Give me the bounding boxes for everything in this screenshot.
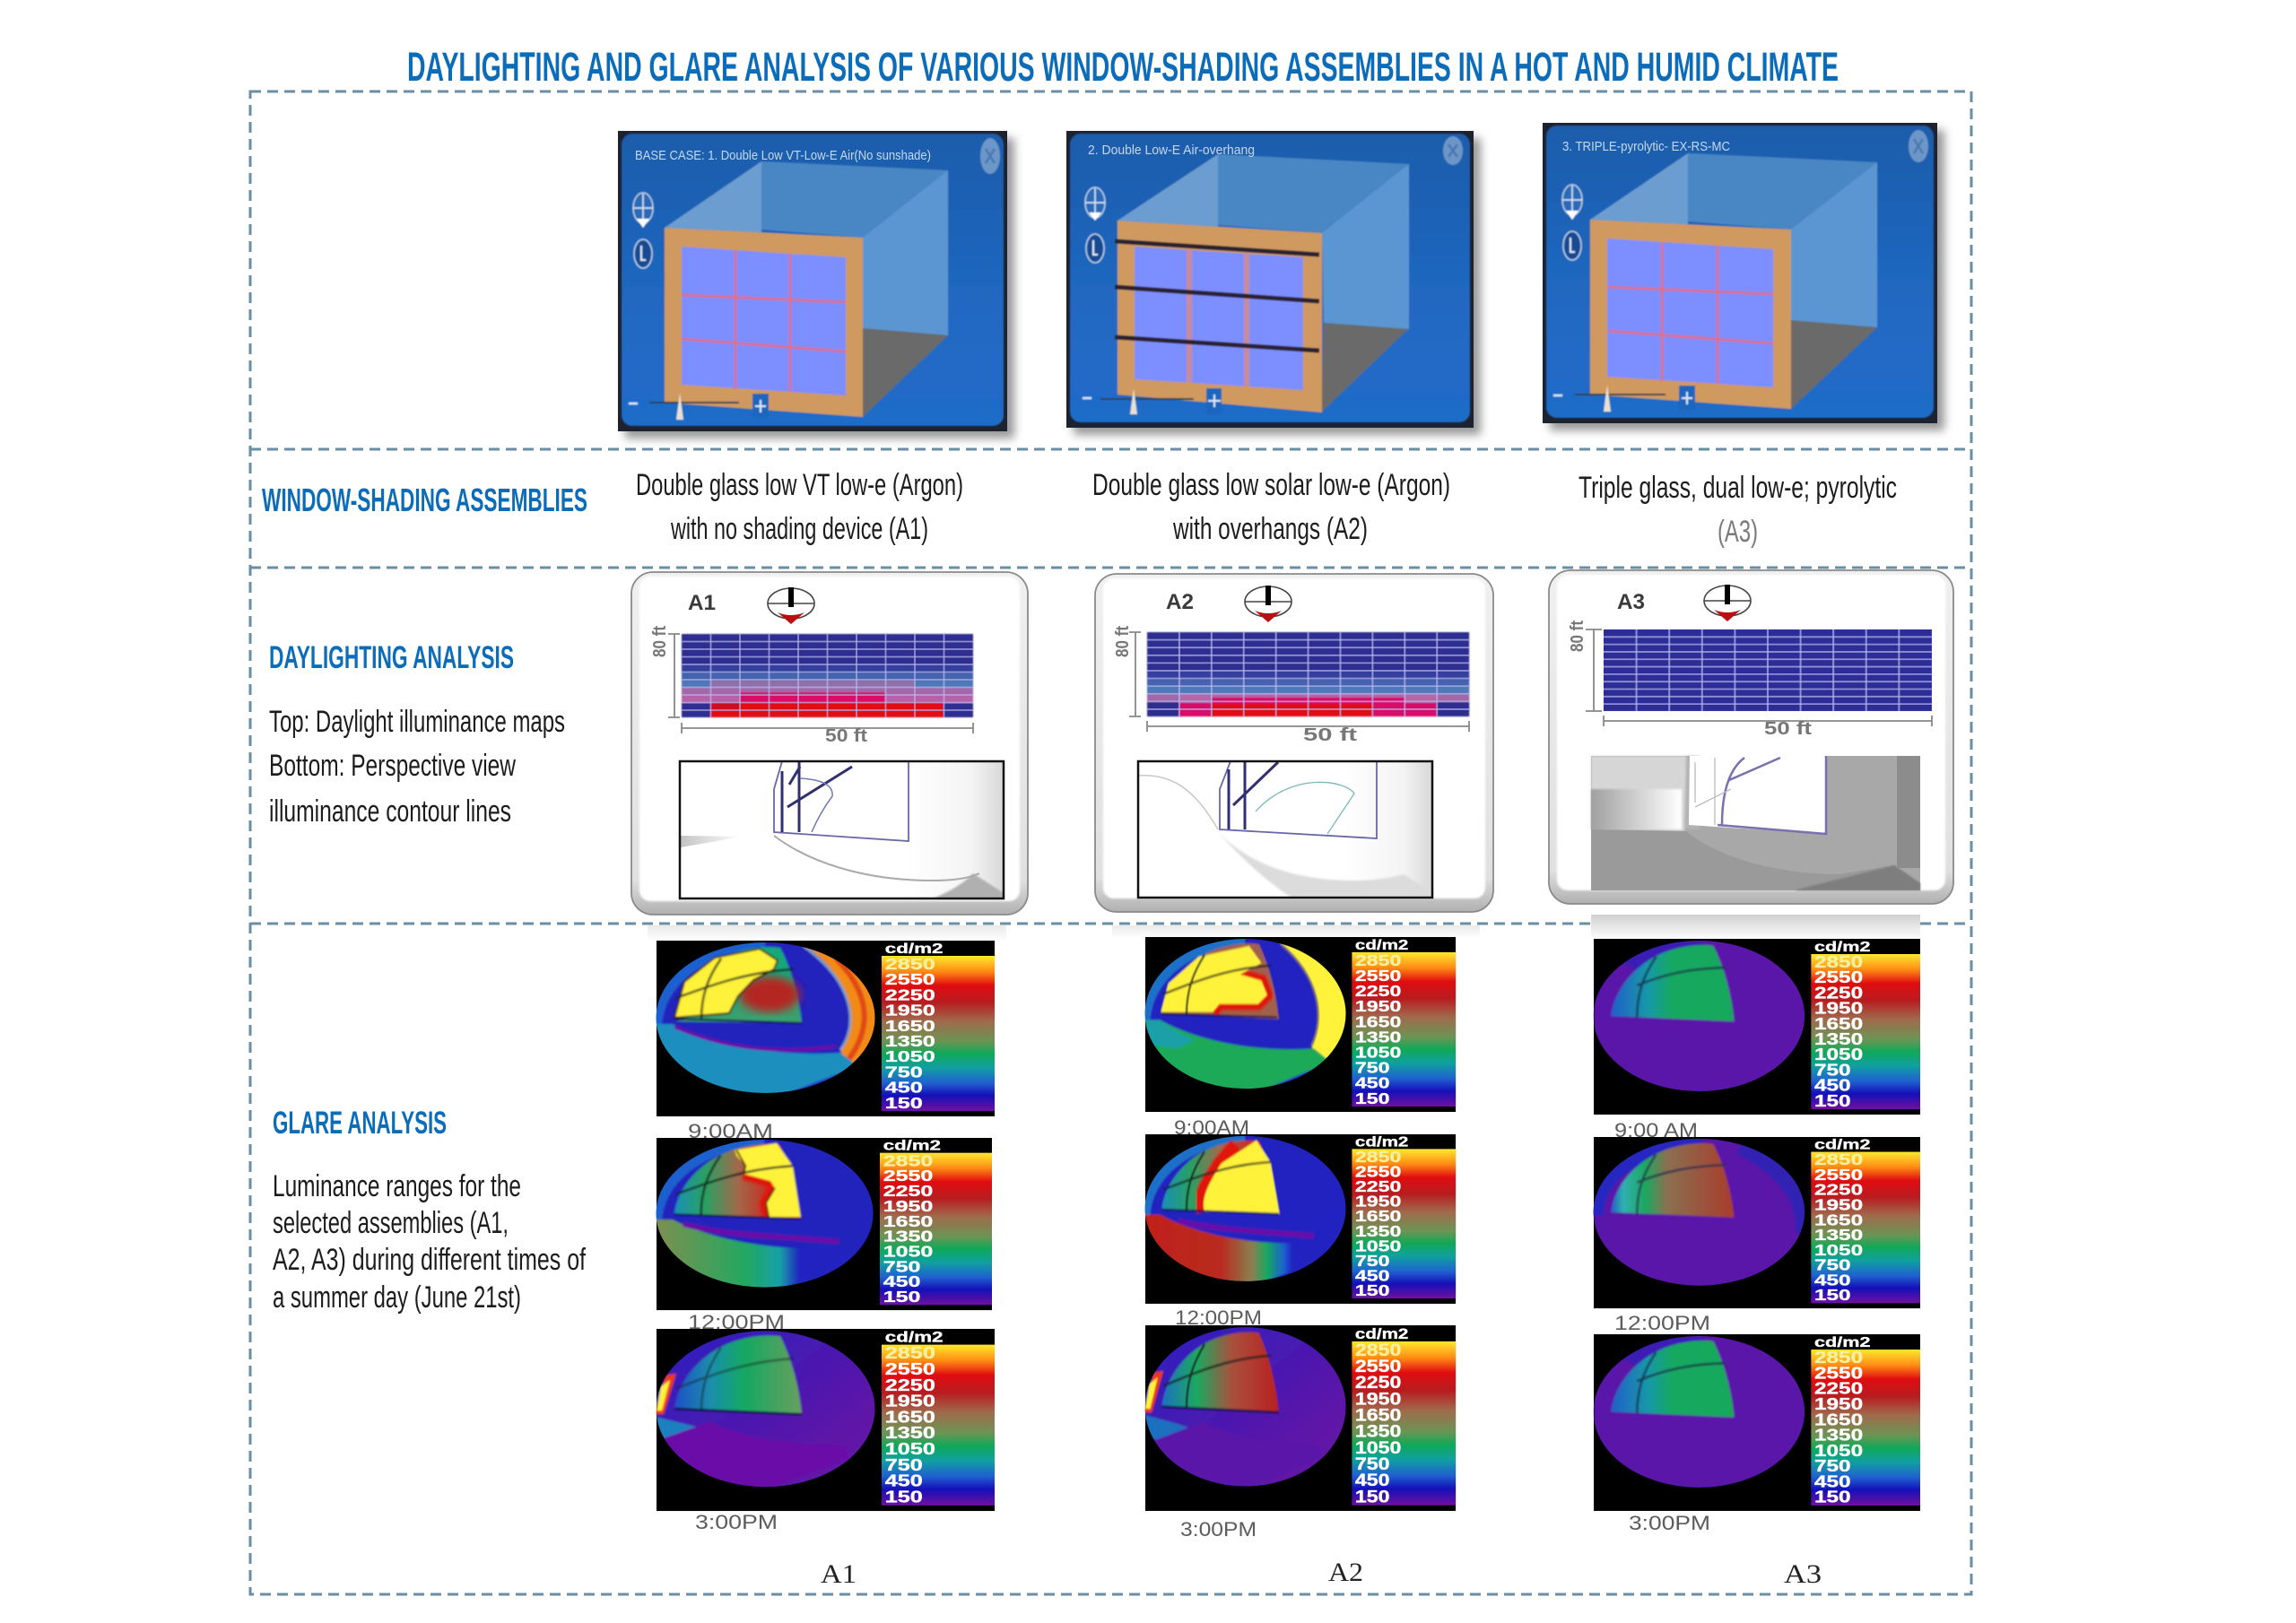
panel: window model A3: 3. TRIPLE-pyrolytic- EX-RS-MC xyxy=(1562,139,1730,154)
glare map A2 12:00PM: 1050 xyxy=(1355,1237,1401,1255)
time label A2 12PM: 12:00PM xyxy=(1175,1306,1262,1329)
icon: compass xyxy=(1704,585,1751,621)
glare map A3 3:00PM: 1050 xyxy=(1814,1442,1863,1460)
panel: daylighting card A3 xyxy=(1549,570,1953,904)
glare map A3 12:00PM: 1950 xyxy=(1814,1197,1863,1214)
glare map A1 9:00AM xyxy=(655,941,995,1116)
glare map A3 12:00PM: 1350 xyxy=(1814,1227,1863,1244)
glare map A2 3:00PM: 1950 xyxy=(1355,1390,1401,1409)
glare map A3 12:00PM: 2850 xyxy=(1814,1151,1863,1168)
text: glare description: a summer day (June 21st) xyxy=(273,1280,521,1315)
glare map A2 3:00PM: 2850 xyxy=(1355,1341,1401,1359)
glare map A2 9:00AM: 2550 xyxy=(1355,967,1401,985)
glare map A1 9:00AM: cd/m2 xyxy=(885,941,944,957)
column label A1: A1 xyxy=(821,1559,857,1589)
time label A1 9AM: 9:00AM xyxy=(688,1120,773,1142)
glare map A1 9:00AM: 2550 xyxy=(885,970,935,988)
label: A2: A2 xyxy=(1166,590,1194,614)
glare map A1 3:00PM: 2250 xyxy=(885,1376,935,1394)
text: glare description: selected assemblies (A1, xyxy=(273,1206,509,1240)
dimension 80 ft: 80 ft xyxy=(1113,626,1133,657)
glare map A1 9:00AM: 2250 xyxy=(885,985,935,1004)
dimension 50 ft: 50 ft xyxy=(1764,719,1812,739)
glare map A3 3:00PM: 150 xyxy=(1814,1488,1851,1506)
glare map A1 3:00PM xyxy=(655,1329,995,1511)
text: assembly A3 description: (A3) xyxy=(1718,515,1758,549)
glare map A1 3:00PM: 1650 xyxy=(885,1408,935,1427)
perspective contour view A3 xyxy=(1591,756,1920,890)
glare map A2 3:00PM: 1050 xyxy=(1355,1439,1401,1457)
glare map A1 3:00PM: cd/m2 xyxy=(885,1329,944,1346)
text: assembly A1 description: with no shading device (A1) xyxy=(670,512,928,546)
glare map A3 9:00AM: 2550 xyxy=(1814,968,1863,986)
time label A2 9AM: 9:00AM xyxy=(1174,1116,1249,1139)
panel: window model A2 xyxy=(1066,131,1481,435)
perspective contour view A1 xyxy=(680,761,1004,898)
glare map A3 9:00AM: 150 xyxy=(1814,1092,1851,1110)
time label A3 12PM: 12:00PM xyxy=(1614,1312,1710,1334)
icon: compass xyxy=(768,587,814,624)
glare map A3 12:00PM: 750 xyxy=(1814,1257,1851,1274)
glare map A3 12:00PM: 1050 xyxy=(1814,1242,1863,1259)
time label A1 12PM: 12:00PM xyxy=(688,1311,785,1333)
glare map A2 9:00AM: 1050 xyxy=(1355,1044,1401,1062)
glare map A3 9:00AM: 1650 xyxy=(1814,1015,1863,1033)
glare map A2 12:00PM: 2550 xyxy=(1355,1163,1401,1181)
glare map A2 3:00PM: 1650 xyxy=(1355,1406,1401,1425)
text: daylighting description: Bottom: Perspective view xyxy=(269,749,516,783)
text: assembly A1 description: Double glass low VT low-e (Argon) xyxy=(636,468,963,502)
heading: daylighting analysis: DAYLIGHTING ANALYSIS xyxy=(269,640,514,675)
glare map A2 3:00PM xyxy=(1144,1325,1456,1511)
glare map A2 3:00PM: 450 xyxy=(1355,1471,1389,1490)
text: daylighting description xyxy=(269,705,565,829)
glare map A2 9:00AM: cd/m2 xyxy=(1355,936,1408,952)
glare map A3 9:00AM: 750 xyxy=(1814,1061,1851,1080)
dimension 50 ft: 50 ft xyxy=(825,726,867,746)
glare map A3 12:00PM: 2250 xyxy=(1814,1182,1863,1199)
dimension 50 ft: 50 ft xyxy=(1303,725,1357,745)
label: A1: A1 xyxy=(688,591,716,615)
glare map A3 3:00PM xyxy=(1594,1334,1920,1511)
glare map A2 9:00AM: 1950 xyxy=(1355,998,1401,1016)
glare map A1 12:00PM: 150 xyxy=(883,1288,920,1306)
glare map A2 9:00AM: 750 xyxy=(1355,1059,1389,1077)
glare map A2 12:00PM: 450 xyxy=(1355,1267,1389,1285)
glare map A3 12:00PM: cd/m2 xyxy=(1814,1137,1870,1152)
heading: glare analysis: GLARE ANALYSIS xyxy=(273,1106,447,1141)
text: assembly A1 description xyxy=(636,468,963,546)
glare map A1 3:00PM: 1350 xyxy=(885,1423,935,1442)
text: daylighting description: illuminance contour lines xyxy=(269,794,511,829)
glare map A1 12:00PM: 450 xyxy=(883,1272,920,1290)
glare map A3 3:00PM: 750 xyxy=(1814,1457,1851,1475)
glare map A2 12:00PM: 1650 xyxy=(1355,1208,1401,1225)
glare map A3 3:00PM: 1650 xyxy=(1814,1410,1863,1429)
glare map A3 12:00PM: 450 xyxy=(1814,1271,1851,1289)
panel: window model A2: 2. Double Low-E Air-overhang xyxy=(1088,143,1255,158)
glare map A2 9:00AM xyxy=(1144,936,1456,1112)
glare map A1 12:00PM: 1350 xyxy=(883,1227,933,1245)
glare map A2 12:00PM: 2250 xyxy=(1355,1178,1401,1195)
illuminance map A2 xyxy=(1147,632,1469,716)
glare map A1 9:00AM: 1950 xyxy=(885,1001,935,1020)
glare map A2 3:00PM: cd/m2 xyxy=(1355,1325,1408,1341)
panel: window model A1: BASE CASE: 1. Double Low VT-Low-E Air(No sunshade) xyxy=(635,148,931,163)
glare map A2 12:00PM xyxy=(1144,1134,1456,1304)
glare map A1 12:00PM xyxy=(655,1138,992,1310)
glare map A1 12:00PM: 2250 xyxy=(883,1182,933,1200)
glare map A2 12:00PM: 1350 xyxy=(1355,1222,1401,1240)
glare map A1 9:00AM: 2850 xyxy=(885,955,935,973)
glare map A3 9:00AM: 1950 xyxy=(1814,1000,1863,1018)
glare map A3 12:00PM: 2550 xyxy=(1814,1167,1863,1184)
text: glare description xyxy=(273,1169,586,1315)
illuminance map A1 xyxy=(682,634,973,717)
glare map A1 3:00PM: 750 xyxy=(885,1455,923,1474)
faint card reflections xyxy=(648,915,1920,942)
time label A3 3PM: 3:00PM xyxy=(1629,1512,1710,1534)
glare map A1 12:00PM: 750 xyxy=(883,1257,920,1275)
glare map A1 3:00PM: 2550 xyxy=(885,1359,935,1378)
glare map A2 12:00PM: 150 xyxy=(1355,1282,1389,1299)
text: assembly A2 description xyxy=(1092,468,1450,546)
glare map A1 12:00PM: 1050 xyxy=(883,1242,933,1261)
glare map A2 9:00AM: 1650 xyxy=(1355,1013,1401,1031)
glare map A3 3:00PM: 2850 xyxy=(1814,1349,1863,1367)
panel: daylighting card A2 xyxy=(1095,574,1493,912)
glare map A2 3:00PM: 2250 xyxy=(1355,1374,1401,1393)
time label A3 9AM: 9:00 AM xyxy=(1614,1119,1698,1141)
panel: window model A3 xyxy=(1543,123,1944,430)
glare map A2 3:00PM: 1350 xyxy=(1355,1422,1401,1441)
glare map A2 12:00PM: 1950 xyxy=(1355,1193,1401,1211)
glare map A2 3:00PM: 2550 xyxy=(1355,1358,1401,1376)
dashed frame and row dividers xyxy=(250,91,1971,1594)
glare map A1 12:00PM: cd/m2 xyxy=(883,1139,941,1154)
column label A3: A3 xyxy=(1784,1559,1822,1589)
glare map A1 3:00PM: 450 xyxy=(885,1471,923,1490)
glare map A2 9:00AM: 1350 xyxy=(1355,1028,1401,1046)
glare map A1 12:00PM: 2550 xyxy=(883,1167,933,1185)
glare map A2 3:00PM: 750 xyxy=(1355,1455,1389,1473)
icon: compass xyxy=(1245,586,1292,622)
glare map A3 9:00AM: 1350 xyxy=(1814,1030,1863,1048)
text: daylighting description: Top: Daylight illuminance maps xyxy=(269,705,565,739)
glare map A3 3:00PM: 1350 xyxy=(1814,1427,1863,1445)
glare map A2 9:00AM: 150 xyxy=(1355,1089,1389,1107)
glare map A3 3:00PM: cd/m2 xyxy=(1814,1335,1870,1350)
glare map A3 9:00AM xyxy=(1594,939,1920,1115)
glare map A3 3:00PM: 2550 xyxy=(1814,1364,1863,1383)
glare map A3 9:00AM: 2250 xyxy=(1814,984,1863,1002)
glare map A1 12:00PM: 2850 xyxy=(883,1151,933,1169)
heading: window-shading assemblies: WINDOW-SHADING ASSEMBLIES xyxy=(262,482,587,518)
glare map A2 3:00PM: 150 xyxy=(1355,1488,1389,1506)
glare map A1 3:00PM: 1950 xyxy=(885,1392,935,1410)
glare map A3 12:00PM: 150 xyxy=(1814,1287,1851,1304)
perspective contour view A2 xyxy=(1138,761,1432,898)
glare map A1 3:00PM: 2850 xyxy=(885,1343,935,1362)
label: A3: A3 xyxy=(1617,590,1645,614)
glare map A2 9:00AM: 2250 xyxy=(1355,982,1401,1000)
glare map A3 9:00AM: 1050 xyxy=(1814,1046,1863,1063)
glare map A1 12:00PM: 1650 xyxy=(883,1211,933,1230)
glare map A1 3:00PM: 150 xyxy=(885,1488,923,1506)
time label A1 3PM: 3:00PM xyxy=(695,1511,778,1533)
glare map A1 3:00PM: 1050 xyxy=(885,1439,935,1458)
text: assembly A2 description: Double glass low solar low-e (Argon) xyxy=(1092,468,1450,502)
illuminance map A3 xyxy=(1604,629,1932,711)
glare map A2 12:00PM: 750 xyxy=(1355,1253,1389,1270)
glare map A1 9:00AM: 1650 xyxy=(885,1016,935,1035)
panel: daylighting card A1 xyxy=(631,572,1028,915)
glare map A2 12:00PM: 2850 xyxy=(1355,1149,1401,1166)
glare map A3 9:00AM: 2850 xyxy=(1814,953,1863,971)
glare map A3 3:00PM: 2250 xyxy=(1814,1380,1863,1398)
glare map A1 9:00AM: 1350 xyxy=(885,1032,935,1050)
text: assembly A3 description xyxy=(1578,471,1897,549)
dimension 80 ft: 80 ft xyxy=(650,626,670,657)
glare map A3 3:00PM: 1950 xyxy=(1814,1395,1863,1413)
glare map A3 9:00AM: cd/m2 xyxy=(1814,940,1871,955)
text: assembly A2 description: with overhangs (A2) xyxy=(1172,512,1368,546)
dimension 80 ft: 80 ft xyxy=(1568,621,1587,652)
glare map A1 9:00AM: 450 xyxy=(885,1078,923,1097)
time label A2 3PM: 3:00PM xyxy=(1180,1518,1257,1541)
glare map A3 12:00PM: 1650 xyxy=(1814,1211,1863,1228)
glare map A1 9:00AM: 1050 xyxy=(885,1047,935,1065)
glare map A3 12:00PM xyxy=(1594,1137,1920,1308)
text: assembly A3 description: Triple glass, dual low-e; pyrolytic xyxy=(1578,471,1897,505)
glare map A1 9:00AM: 750 xyxy=(885,1063,923,1081)
glare map A3 9:00AM: 450 xyxy=(1814,1077,1851,1095)
text: glare description: Luminance ranges for the xyxy=(273,1169,521,1203)
glare map A2 12:00PM: cd/m2 xyxy=(1355,1134,1408,1150)
glare map A3 3:00PM: 450 xyxy=(1814,1472,1851,1491)
column label A2: A2 xyxy=(1328,1558,1363,1587)
text: glare description: A2, A3) during different times of xyxy=(273,1243,586,1277)
glare map A2 9:00AM: 2850 xyxy=(1355,951,1401,969)
glare map A1 12:00PM: 1950 xyxy=(883,1197,933,1215)
glare map A1 9:00AM: 150 xyxy=(885,1093,923,1112)
panel: window model A1 xyxy=(618,131,1014,438)
glare map A2 9:00AM: 450 xyxy=(1355,1074,1389,1092)
